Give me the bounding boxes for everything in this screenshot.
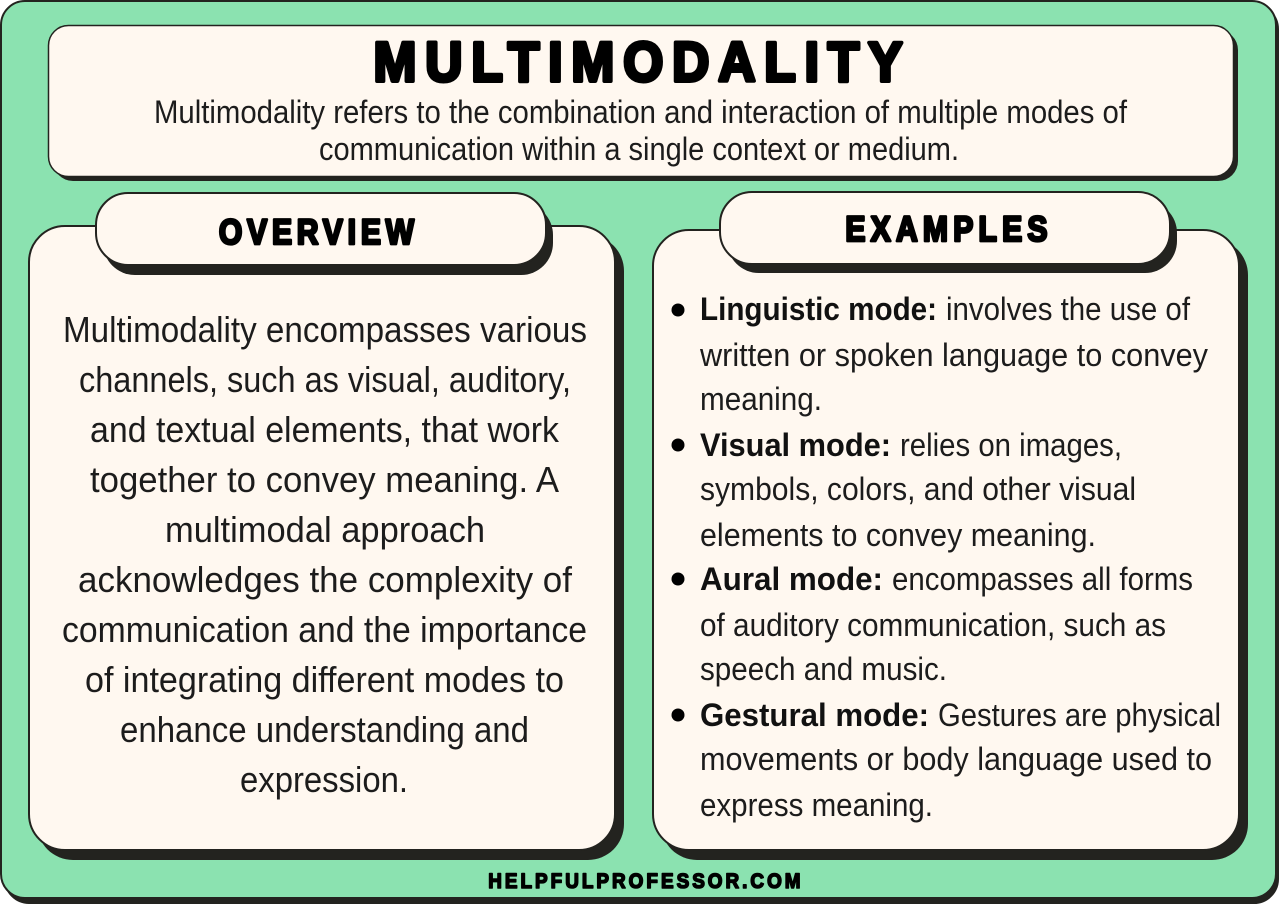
example: visual mode: elements to convey meaning.	[700, 517, 1096, 553]
overview text: and textual elements, that work	[90, 409, 560, 450]
subtitle: communication within a single context or medium.	[319, 131, 959, 167]
overview text: of integrating different modes to	[85, 659, 564, 700]
overview text: communication and the importance	[62, 609, 587, 650]
overview heading: OVERVIEW	[219, 212, 414, 252]
overview heading tab	[96, 193, 553, 275]
example: visual mode	[672, 427, 1136, 553]
example: visual mode: Visual mode:	[700, 427, 891, 463]
example: linguistic mode	[672, 291, 1208, 417]
subtitle	[154, 94, 1127, 167]
example: gestural mode: movements or body language used to	[700, 741, 1212, 777]
footer website label: HELPFULPROFESSOR.COM	[488, 870, 801, 893]
overview text: multimodal approach	[165, 509, 485, 550]
examples heading tab	[720, 192, 1177, 273]
example: linguistic mode: meaning.	[700, 381, 822, 417]
example: linguistic mode: involves the use of	[946, 291, 1190, 327]
example: aural mode: speech and music.	[700, 651, 947, 687]
subtitle: Multimodality refers to the combination and interaction of multiple modes of	[154, 94, 1127, 130]
example: gestural mode: Gestures are physical	[938, 697, 1221, 733]
example: aural mode: of auditory communication, such as	[700, 607, 1166, 643]
example: gestural mode	[672, 697, 1221, 823]
example: aural mode: Aural mode:	[700, 561, 883, 597]
example: visual mode: relies on images,	[900, 427, 1122, 463]
example: aural mode: encompasses all forms	[892, 561, 1193, 597]
overview text: acknowledges the complexity of	[78, 559, 573, 600]
overview text: enhance understanding and	[120, 709, 529, 750]
example: gestural mode: Gestural mode:	[700, 697, 929, 733]
title: MULTIMODALITY	[374, 31, 903, 93]
panel: examples	[653, 192, 1248, 860]
overview text: Multimodality encompasses various	[63, 309, 587, 350]
examples heading: EXAMPLES	[845, 209, 1047, 249]
overview text: channels, such as visual, auditory,	[79, 359, 571, 400]
example: visual mode: symbols, colors, and other visual	[700, 471, 1136, 507]
panel: header	[48, 26, 1238, 181]
overview text: together to convey meaning. A	[90, 459, 559, 500]
overview text: expression.	[240, 759, 408, 800]
example: linguistic mode: written or spoken language to convey	[699, 337, 1208, 373]
example: gestural mode: express meaning.	[700, 787, 933, 823]
panel: overview	[29, 193, 624, 860]
example: aural mode	[672, 561, 1193, 687]
example: linguistic mode: Linguistic mode:	[700, 291, 937, 327]
overview text	[62, 309, 587, 800]
